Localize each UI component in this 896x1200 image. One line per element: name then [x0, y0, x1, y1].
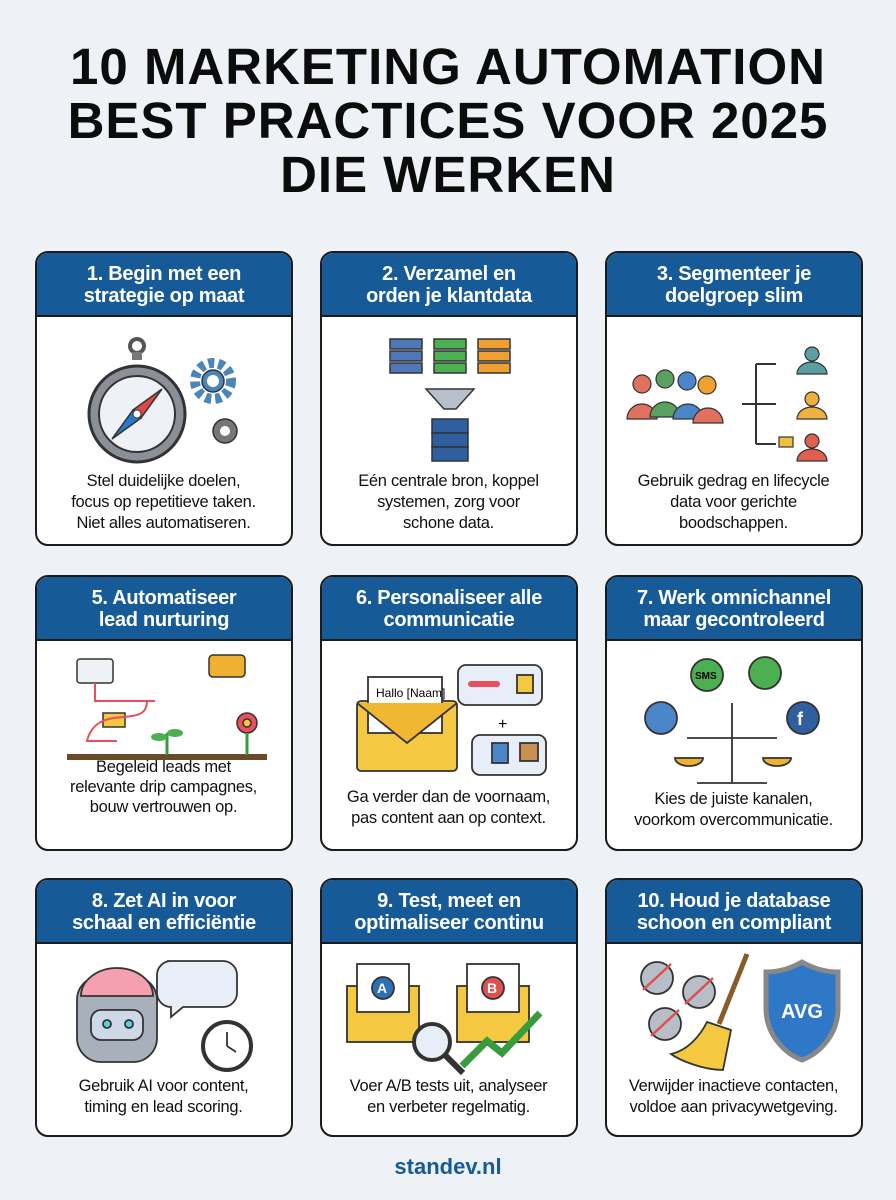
text 8: Gebruik AI voor content,	[79, 1077, 248, 1095]
heading 5: 5. Automatiseer	[92, 587, 236, 609]
heading 7: 7. Werk omnichannel	[637, 587, 831, 609]
text 10: voldoe aan privacywetgeving.	[629, 1098, 838, 1116]
text 5: relevante drip campagnes,	[70, 778, 257, 796]
text 2	[358, 472, 539, 532]
icon: envelope personalization	[356, 664, 547, 776]
text 10: Verwijder inactieve contacten,	[629, 1077, 838, 1095]
text 1: Stel duidelijke doelen,	[87, 472, 240, 490]
icon: balance with channels: f	[797, 709, 804, 729]
heading 10: 10. Houd je database	[638, 890, 830, 912]
text 7: Kies de juiste kanalen,	[654, 790, 813, 808]
icon: robot brain clock	[76, 960, 253, 1072]
text 9: Voer A/B tests uit, analyseer	[350, 1077, 547, 1095]
text 1	[71, 472, 256, 532]
icon: balance with channels: SMS	[695, 671, 717, 682]
icon: envelope personalization: +	[498, 716, 507, 733]
text 8: timing en lead scoring.	[84, 1098, 243, 1116]
text 6	[347, 788, 550, 827]
text 5: bouw vertrouwen op.	[90, 798, 237, 816]
heading 8: 8. Zet AI in voor	[92, 890, 236, 912]
panel: 5 lead nurturing	[35, 575, 293, 851]
heading 2: orden je klantdata	[366, 285, 532, 307]
panel: 6 personaliseer	[320, 575, 578, 851]
title: 10 MARKETING AUTOMATION	[70, 38, 826, 95]
icon: broom and AVG shield: AVG	[781, 1001, 823, 1023]
heading 8	[37, 880, 291, 944]
panel: 9 testen	[320, 878, 578, 1137]
panel: 1 strategie	[35, 251, 293, 546]
heading 2: 2. Verzamel en	[382, 263, 516, 285]
text 3: boodschappen.	[679, 514, 788, 532]
heading 3: doelgroep slim	[665, 285, 803, 307]
text 5: Begeleid leads met	[96, 758, 231, 776]
panel: 2 klantdata	[320, 251, 578, 546]
heading 10: schoon en compliant	[637, 912, 831, 934]
heading 6: communicatie	[384, 609, 514, 631]
icon: databases funnel	[389, 338, 511, 462]
title: BEST PRACTICES VOOR 2025	[68, 92, 828, 149]
text 1: Niet alles automatiseren.	[76, 514, 251, 532]
heading 1: 1. Begin met een	[87, 263, 241, 285]
text 6: Ga verder dan de voornaam,	[347, 788, 550, 806]
heading 1	[37, 253, 291, 317]
text 9	[350, 1077, 548, 1116]
heading 6: 6. Personaliseer alle	[356, 587, 542, 609]
text 1: focus op repetitieve taken.	[71, 493, 256, 511]
icon: drip flow plants	[67, 654, 267, 760]
heading 5	[37, 577, 291, 641]
text 2: systemen, zorg voor	[377, 493, 520, 511]
icon: A/B envelopes chart: B	[487, 980, 497, 996]
panel: 8 AI	[35, 878, 293, 1137]
panel: 7 omnichannel	[605, 575, 863, 851]
text 6: pas content aan op context.	[351, 809, 546, 827]
icon: compass and gears	[88, 337, 238, 464]
icon: A/B envelopes chart	[346, 963, 542, 1076]
heading 7	[607, 577, 861, 641]
icon: A/B envelopes chart: A	[377, 980, 387, 996]
heading 8: schaal en efficiëntie	[72, 912, 256, 934]
text 9: en verbeter regelmatig.	[367, 1098, 530, 1116]
text 7: voorkom overcommunicatie.	[634, 811, 833, 829]
text 3: data voor gerichte	[670, 493, 797, 511]
icon: envelope personalization: Hallo [Naam]	[376, 686, 445, 700]
icon: crowd segments	[626, 346, 828, 462]
title	[68, 38, 828, 203]
heading 9: 9. Test, meet en	[377, 890, 521, 912]
heading 9: optimaliseer continu	[354, 912, 544, 934]
footer: standev.nl	[394, 1154, 502, 1179]
heading 3	[607, 253, 861, 317]
panel: 3 segmenteer	[605, 251, 863, 546]
text 7	[634, 790, 833, 829]
text 2: schone data.	[403, 514, 494, 532]
heading 1: strategie op maat	[84, 285, 244, 307]
text 5	[70, 758, 257, 816]
heading 10	[607, 880, 861, 944]
text 3: Gebruik gedrag en lifecycle	[638, 472, 829, 490]
text 2: Eén centrale bron, koppel	[358, 472, 539, 490]
text 10	[629, 1077, 838, 1116]
heading 3: 3. Segmenteer je	[657, 263, 811, 285]
icon: balance with channels	[644, 656, 820, 784]
heading 2	[322, 253, 576, 317]
text 8	[79, 1077, 248, 1116]
heading 5: lead nurturing	[99, 609, 229, 631]
heading 7: maar gecontroleerd	[643, 609, 825, 631]
heading 9	[322, 880, 576, 944]
panel: 10 database	[605, 878, 863, 1137]
title: DIE WERKEN	[280, 146, 616, 203]
text 3	[638, 472, 829, 532]
icon: broom and AVG shield	[640, 953, 840, 1071]
heading 6	[322, 577, 576, 641]
